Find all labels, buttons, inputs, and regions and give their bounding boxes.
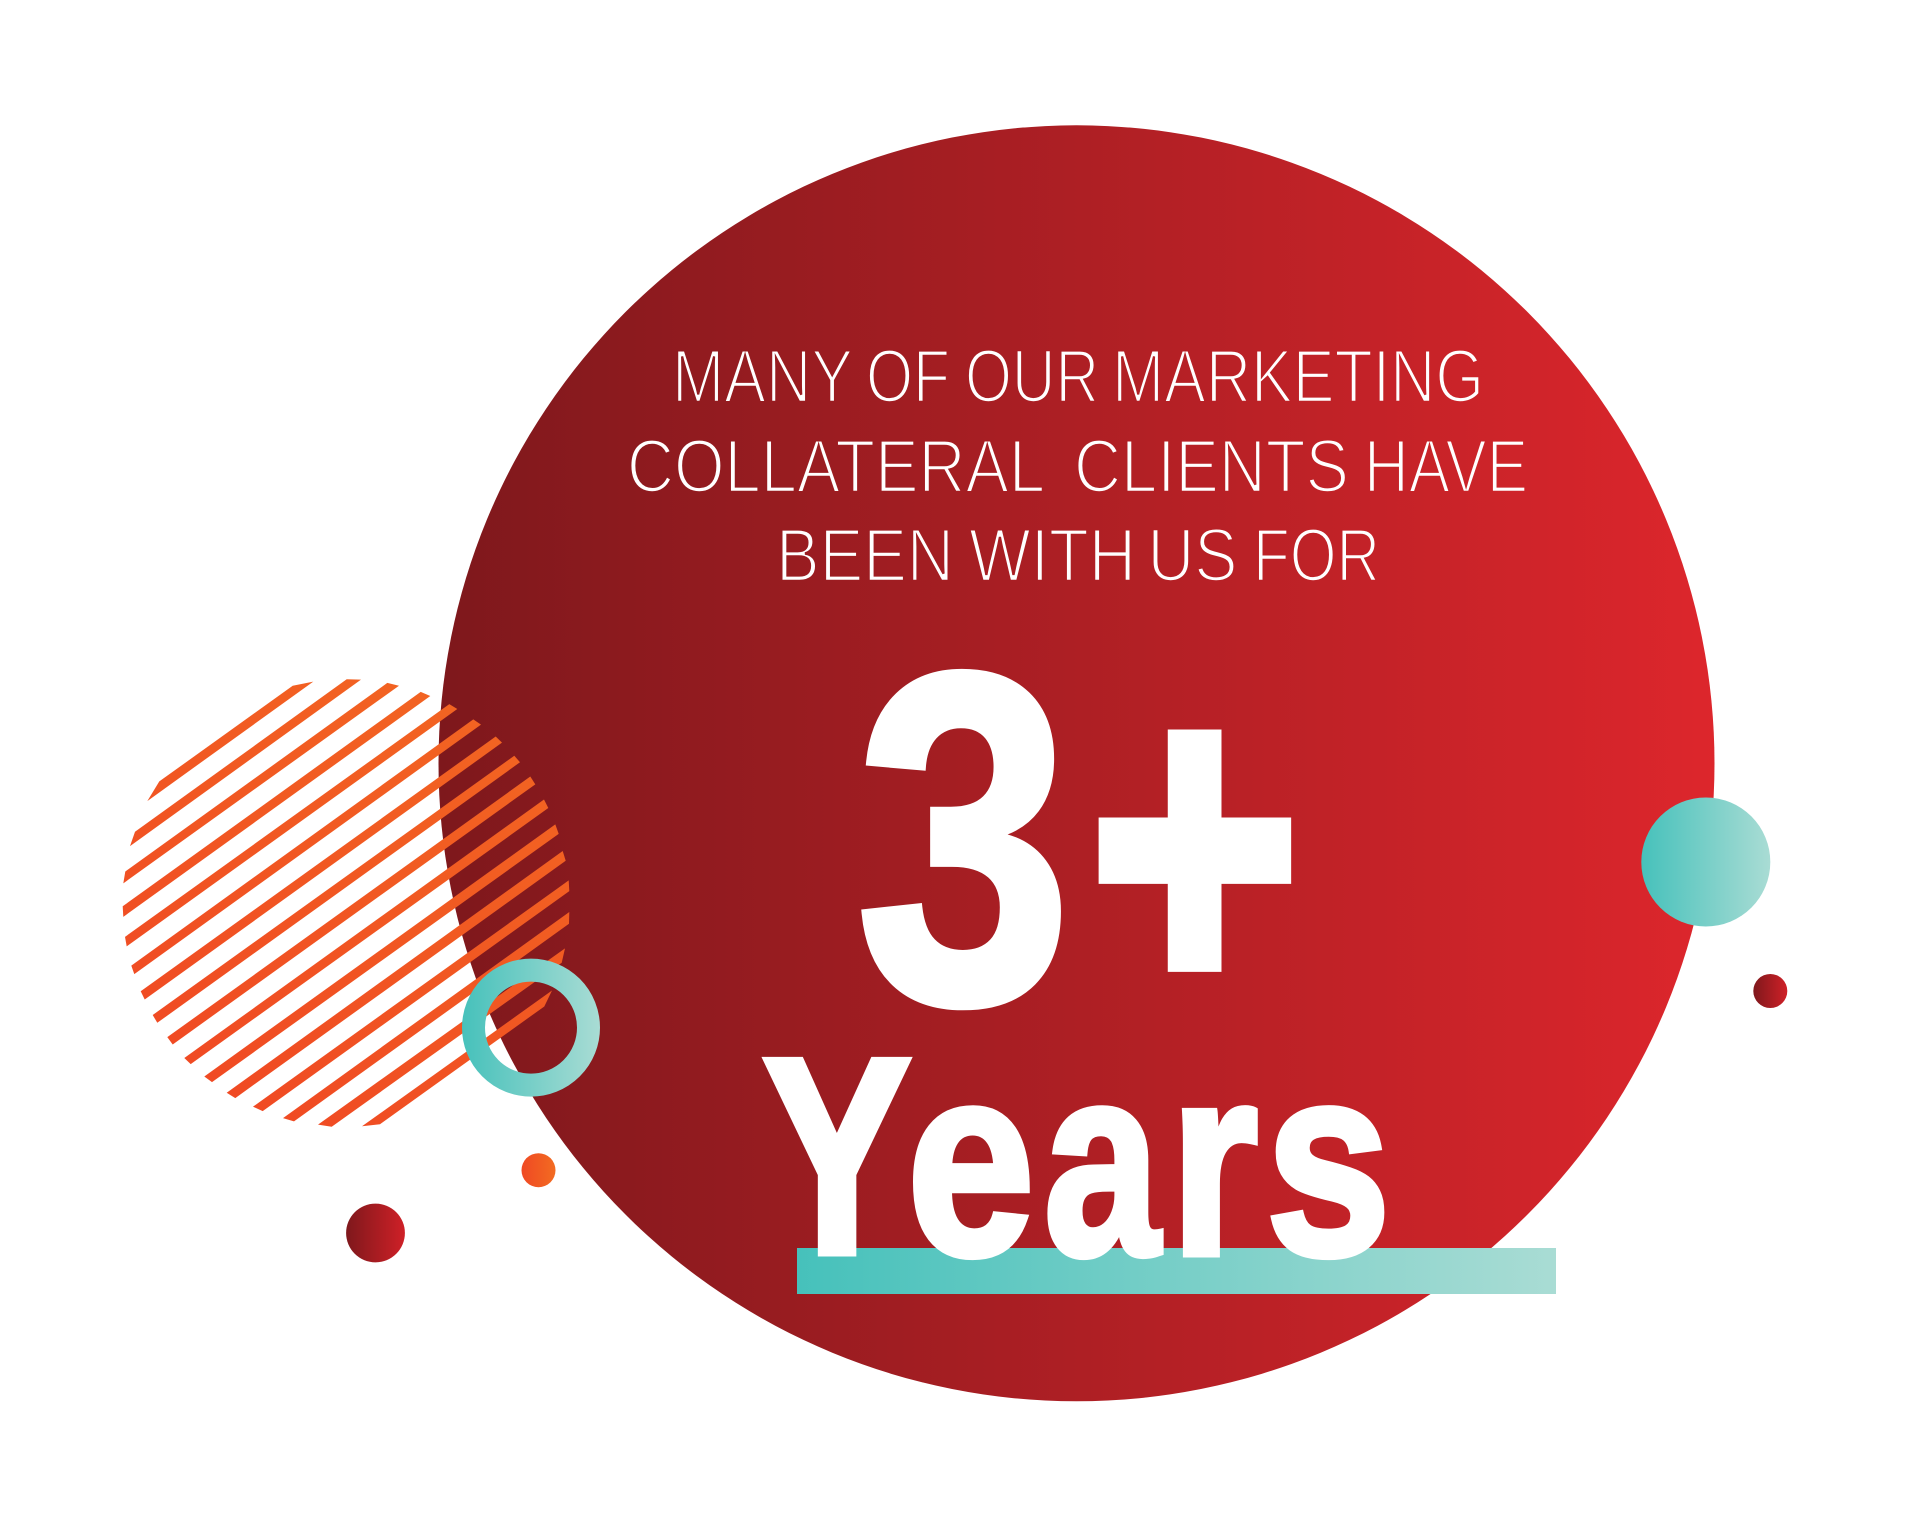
intro text: MARKETING bbox=[1112, 334, 1484, 418]
intro text: CLIENTS bbox=[1074, 424, 1349, 508]
big number 3+ bbox=[856, 577, 1298, 1101]
big number 3+: + bbox=[1091, 597, 1298, 1091]
dark red dot bbox=[346, 1204, 405, 1262]
intro text: HAVE bbox=[1364, 424, 1528, 508]
striped orange disc bbox=[123, 679, 569, 1127]
big number 3+: 3 bbox=[856, 577, 1072, 1101]
word Years: s bbox=[1266, 1009, 1391, 1312]
teal underline bar bbox=[797, 1248, 1556, 1294]
intro text: BEEN bbox=[776, 513, 954, 597]
intro text: COLLATERAL bbox=[627, 424, 1045, 508]
small red dot bbox=[1753, 974, 1787, 1008]
word Years: a bbox=[1044, 1011, 1161, 1312]
orange dot bbox=[522, 1153, 556, 1187]
word Years: Y bbox=[764, 1001, 910, 1311]
word Years bbox=[764, 1001, 1391, 1312]
teal dot on circle edge bbox=[1641, 798, 1770, 926]
intro text: WITH bbox=[969, 513, 1136, 597]
word Years: r bbox=[1170, 1009, 1258, 1311]
intro text: OF bbox=[866, 334, 950, 418]
intro text: OUR bbox=[965, 334, 1099, 418]
teal ring bbox=[474, 970, 588, 1085]
intro text bbox=[627, 334, 1528, 597]
intro text: US bbox=[1148, 513, 1238, 597]
intro text: FOR bbox=[1253, 513, 1380, 597]
word Years: e bbox=[907, 1010, 1035, 1312]
main red circle bbox=[438, 125, 1714, 1401]
intro text: MANY bbox=[672, 334, 853, 418]
